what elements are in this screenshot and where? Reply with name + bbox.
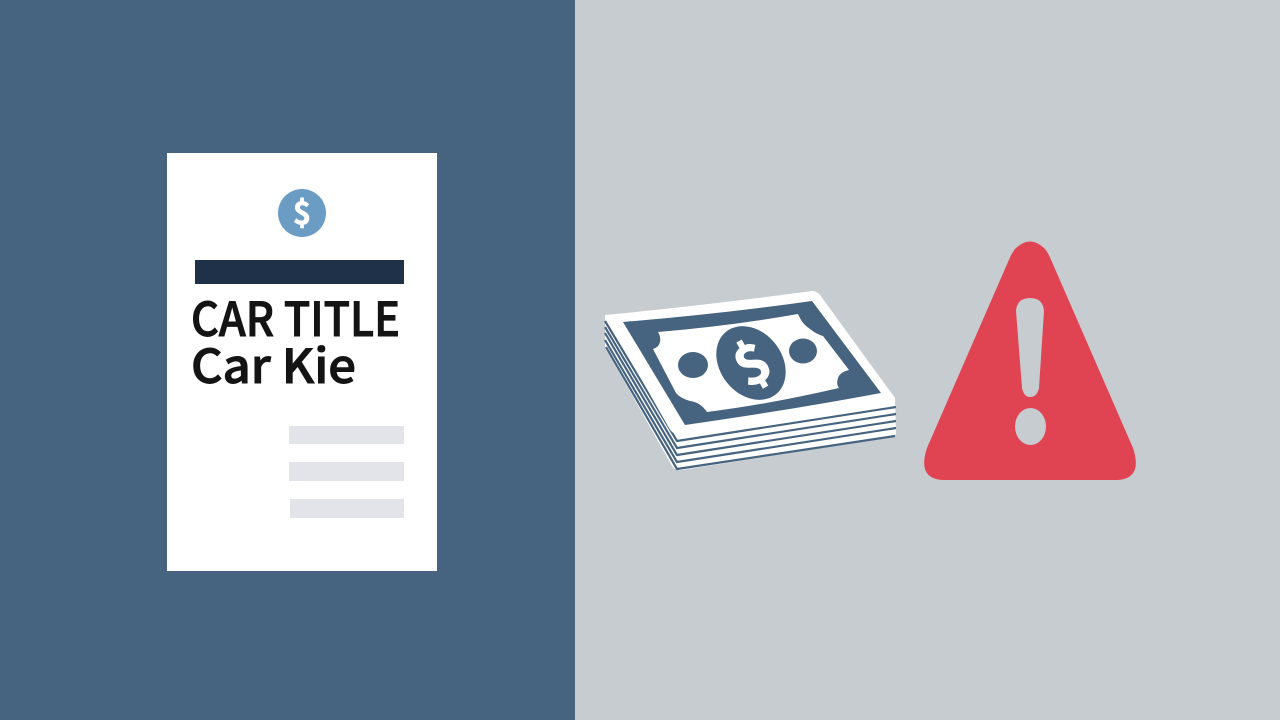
subheading: Car Kie: Car Kie <box>191 328 356 397</box>
icon: dollar coin: $ <box>293 188 311 233</box>
document: car title <box>167 153 437 571</box>
bill dark border <box>623 301 881 425</box>
heading: CAR TITLE: CAR TITLE <box>191 281 400 350</box>
icon: stack of cash <box>605 291 896 470</box>
cash stack edges <box>605 315 896 470</box>
bill right circle <box>789 338 817 364</box>
document header bar <box>195 260 404 284</box>
bill inner white panel <box>653 314 849 412</box>
bill left circle <box>678 352 708 378</box>
placeholder text lines <box>289 426 404 518</box>
icon: warning triangle <box>924 242 1136 480</box>
panel: right grey background <box>575 0 1280 720</box>
bill central oval with dollar <box>702 312 800 414</box>
icon: dollar coin <box>278 188 326 237</box>
panel: left blue background <box>0 0 575 720</box>
bill central oval with dollar: $ <box>717 318 784 403</box>
document sheet <box>167 153 437 571</box>
top bill white face <box>605 291 895 434</box>
